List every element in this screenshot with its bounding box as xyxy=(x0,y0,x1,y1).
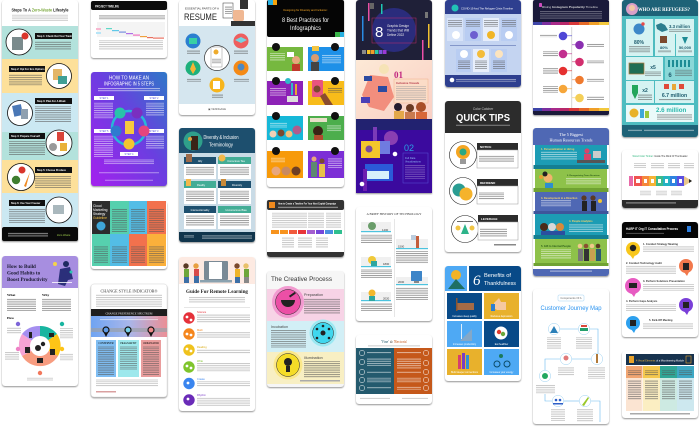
title: Guide For Remote Learning xyxy=(186,290,248,295)
tip: leverage: LEVERAGE xyxy=(481,217,498,221)
step labels: STEP 2 xyxy=(150,96,159,100)
panel: pencil process xyxy=(622,150,698,208)
section 02: Visualizations xyxy=(405,160,422,164)
benefit 6: Increases your energy xyxy=(490,371,514,374)
panel: quick tips xyxy=(445,101,521,252)
step 2: Step 2: Opt For Eco Options xyxy=(11,68,45,71)
why and what: How xyxy=(7,316,14,320)
section 02: 02 xyxy=(404,143,414,153)
panel: resume xyxy=(179,0,255,115)
practice 3 xyxy=(267,77,303,105)
panel: creative process xyxy=(267,271,344,387)
title: Marketing xyxy=(93,208,108,212)
title: Guideline xyxy=(93,216,107,220)
trend 4 xyxy=(534,214,608,239)
section 01: 01 xyxy=(394,70,404,80)
title: How to Create a Timeline For Your Next Capital Campaign xyxy=(278,203,336,206)
node 3 xyxy=(558,353,574,376)
node 1 xyxy=(547,323,561,349)
era 4: 2000 xyxy=(398,280,405,284)
pragmatist: PRAGMATIST xyxy=(120,342,137,345)
panel: good habits xyxy=(2,256,78,386)
term: identity: Diversity xyxy=(232,183,243,187)
step cycle diagram xyxy=(110,108,150,150)
step 2 xyxy=(9,64,72,88)
step 4: Step 4: Prepare Yourself xyxy=(11,135,40,138)
panel: graphic design trends: Trends that Will xyxy=(387,28,409,32)
title: The Creative Process xyxy=(271,276,332,283)
panel: covid timeline xyxy=(445,0,521,87)
panel: instagram timeline xyxy=(533,0,609,115)
lesson: 4: Write xyxy=(197,359,204,363)
colour strip bottom xyxy=(533,108,609,111)
practice 7 xyxy=(267,147,303,178)
tip: notice: NOTICE xyxy=(480,145,491,149)
practice 2 xyxy=(308,43,344,71)
panel: 8 best practices xyxy=(267,0,344,187)
footer xyxy=(8,232,71,237)
lesson: 6: Rhythm xyxy=(197,393,206,397)
era 2: 1500 xyxy=(398,244,405,248)
icon: badge right xyxy=(686,356,691,363)
step 4: 4. Perform Gaps Analysis xyxy=(626,299,658,303)
tip: refriend: REFRIEND xyxy=(480,181,496,185)
icon: badge xyxy=(687,226,691,232)
spectrum heading: CHANGE PREFERENCE SPECTRUM xyxy=(106,311,153,315)
lesson: 5: Create xyxy=(197,377,205,381)
title: Wood Color Timber: Inside The Mind Of The Reader xyxy=(632,154,688,158)
panel: graphic design trends: Graphic Design xyxy=(387,24,409,28)
title: ESSENTIAL PARTS OF A xyxy=(185,6,219,10)
icon: cloud xyxy=(96,222,106,230)
colour strip top xyxy=(533,22,609,25)
stat: 6: 6 xyxy=(668,73,672,79)
era 5: 2020 xyxy=(383,296,390,300)
practice 8 xyxy=(308,147,344,178)
stat: 80% and 50,000: 80% xyxy=(660,45,668,50)
step 2: 2. Conduct Technology Audit xyxy=(626,261,662,265)
step labels: STEP 5 xyxy=(100,129,109,133)
pencil chart xyxy=(629,176,692,186)
term: unconscious bias: Unconscious Bias xyxy=(225,208,247,212)
tip: notice xyxy=(450,142,518,168)
lesson: 1: Science xyxy=(197,310,207,314)
timeline gantt xyxy=(96,15,165,50)
icon: people xyxy=(184,132,202,150)
stat: x5: x5 xyxy=(650,65,656,71)
term: reality: Reality xyxy=(197,183,206,187)
step 1 xyxy=(6,29,73,55)
title: How to Build xyxy=(7,264,36,270)
habit wheel xyxy=(5,322,73,381)
column: orange xyxy=(626,366,642,411)
title: Customer Journey Map xyxy=(540,305,602,312)
lesson: 3: Reading xyxy=(197,345,207,349)
benefit 3: Increases productivity xyxy=(453,343,477,346)
step labels xyxy=(94,96,164,165)
term: conscious: Conscious Tea xyxy=(227,159,245,163)
column: teal xyxy=(660,366,677,411)
practice 6 xyxy=(308,112,344,140)
title xyxy=(7,264,48,283)
spectrum band xyxy=(91,316,167,337)
step 3: Step 3: Plan For A Week xyxy=(37,100,66,103)
lesson: 4 xyxy=(183,359,250,373)
conserver: CONSERVER xyxy=(98,342,114,345)
resume hub xyxy=(204,46,230,70)
panel: quick tips: QUICK TIPS xyxy=(456,113,510,124)
panel: human resources trends: Human Resources Trends xyxy=(549,138,593,142)
icon: globe xyxy=(452,4,458,12)
resume item: awards xyxy=(210,78,224,98)
icon: sunrise mountains xyxy=(445,266,467,291)
title: Good Habits to xyxy=(7,270,41,276)
lesson: 6 xyxy=(183,393,250,406)
step 6 xyxy=(9,197,72,223)
illumination: Illumination xyxy=(304,356,323,360)
stat: x2: x2 xyxy=(642,88,648,94)
panel: remote learning xyxy=(179,257,255,411)
milestones xyxy=(540,32,604,102)
section 02 xyxy=(356,127,432,193)
title: PROJECT TIMELINE xyxy=(95,4,119,8)
node 6 xyxy=(551,395,565,421)
resume item: skills xyxy=(186,60,201,82)
why and what: What xyxy=(7,293,16,297)
title: Steps To A Zero-Waste Lifestyle xyxy=(12,8,69,12)
trend 3 xyxy=(534,192,608,214)
title: Color Catcher xyxy=(473,107,494,111)
step 1: Step 1: Check Out Your Trash xyxy=(37,35,73,38)
trend 1 xyxy=(534,145,608,169)
step 3: 3. Perform Solutions Presentation xyxy=(643,279,685,283)
title: A BRIEF HISTORY OF TECHNOLOGY xyxy=(366,212,422,216)
step 5 xyxy=(8,164,72,190)
resume item: experience xyxy=(234,60,249,82)
benefit 4: Eat healthier xyxy=(495,343,508,346)
node 2 xyxy=(576,323,592,349)
originator: ORIGINATOR xyxy=(143,342,159,345)
panel: cloud marketing strategy xyxy=(91,201,167,269)
icon: badge xyxy=(269,202,275,208)
footer xyxy=(622,125,698,137)
lesson: 1 xyxy=(183,310,250,324)
trend 5: 5. Gift to Internal People xyxy=(541,244,571,248)
stat: 80%: 80% xyxy=(634,40,645,46)
icon: hands with resume xyxy=(223,0,255,26)
right column xyxy=(394,348,432,394)
title: Diversity & Inclusion xyxy=(204,135,239,141)
title: 6 xyxy=(473,273,481,289)
preparation: Preparation xyxy=(304,293,323,297)
step labels: STEP 3 xyxy=(150,129,159,133)
resume item: education xyxy=(234,34,248,54)
title: The 5 Biggest xyxy=(559,132,584,137)
node 4 xyxy=(588,353,605,379)
why and what xyxy=(7,293,71,320)
icon: book xyxy=(629,356,634,363)
term: ally: Ally xyxy=(198,159,203,163)
section 01: Inclusive Visuals xyxy=(396,81,420,85)
panel: how to make an infographic: INFOGRAPHIC IN 5 STEPS xyxy=(104,82,155,88)
practice 4 xyxy=(308,77,344,105)
trend 2 xyxy=(534,169,608,192)
resume item: contact xyxy=(186,34,200,54)
icon: runner xyxy=(52,261,73,286)
panel: 8 best practices: Infographics xyxy=(290,26,321,32)
icon: person xyxy=(626,3,638,15)
subtitle: Components Of A xyxy=(560,296,582,300)
logo: ▣ VENNGAGE xyxy=(208,107,226,111)
practice 5 xyxy=(267,112,303,140)
panel: resume: RESUME xyxy=(184,12,217,22)
hero circle xyxy=(362,3,430,60)
months strip xyxy=(271,230,342,234)
panel: brief history of technology xyxy=(356,207,432,321)
step labels: STEP 1 xyxy=(100,96,109,100)
section 01 xyxy=(356,60,432,119)
panel: customer journey map xyxy=(533,289,609,424)
panel: graphic design trends xyxy=(356,0,432,193)
step 6: Step 6: Use Your Freezer xyxy=(11,202,40,205)
benefit 5: Build deeper connections xyxy=(451,371,479,374)
lesson: 2 xyxy=(183,328,250,340)
step 3 xyxy=(8,98,72,126)
footer: Zero Waste xyxy=(57,233,71,237)
era 3: 1800 xyxy=(383,262,390,266)
why and what: Why xyxy=(42,293,49,297)
panel: benefits of thankfulness xyxy=(445,266,521,381)
node 7 xyxy=(577,395,593,422)
title: Boost Productivity xyxy=(7,277,48,283)
panel: benefits of thankfulness: Benefits of xyxy=(484,273,512,279)
section 02: Full Data xyxy=(405,156,416,160)
panel: human resources trends xyxy=(533,128,609,276)
panel: who are refugees xyxy=(622,0,698,137)
title: Strategy xyxy=(93,212,106,216)
panel: harp it consultation process xyxy=(622,222,698,337)
footer xyxy=(622,200,698,208)
icon: instagram xyxy=(539,3,542,7)
timeline bottom row xyxy=(456,49,507,72)
step 1: 1. Conduct Strategy Meeting xyxy=(643,242,678,246)
title: HOW TO MAKE AN xyxy=(109,76,149,82)
trend 4: 4. People Analytics xyxy=(569,219,593,223)
title: HARP IT Org IT Consultation Process xyxy=(626,227,678,231)
phase columns xyxy=(272,212,341,228)
footer xyxy=(533,269,609,276)
left column xyxy=(356,348,394,394)
panel: change style indicator xyxy=(91,284,167,397)
lesson: 3 xyxy=(183,344,250,356)
panel: capital campaign timeline xyxy=(267,200,344,257)
title: Cloud xyxy=(93,204,102,208)
panel: graphic design trends: Define 2022 xyxy=(387,33,404,37)
stat: 3.3 million: 3.3 million xyxy=(669,24,690,29)
title: WHO ARE REFUGEES? xyxy=(638,8,690,13)
panel: diversity terminology xyxy=(179,128,255,242)
era 1: 1400 xyxy=(382,228,389,232)
step 5: Step 5: Choose Produce xyxy=(37,169,67,172)
journey connectors xyxy=(545,329,600,422)
trend 3: 3. Development in a Direction xyxy=(541,196,578,200)
panel: benefits of thankfulness: Thankfulness xyxy=(484,281,516,287)
panel: diversity terminology: Terminology xyxy=(209,142,233,148)
lesson: 5 xyxy=(183,377,250,389)
panel: project timeline xyxy=(91,1,167,58)
trend 1: 1. Personalization in Hiring xyxy=(541,147,575,151)
column: blue xyxy=(677,366,694,411)
title: 4 Visual Elements of a Microlearning Module xyxy=(636,358,684,362)
tip: leverage xyxy=(452,215,518,242)
trend 2: 2. Reorganizing Team Structure xyxy=(567,174,601,177)
title xyxy=(93,204,108,220)
panel: microlearning module xyxy=(622,351,698,418)
term: intersectionality: Intersectionality xyxy=(191,208,210,212)
footer xyxy=(445,75,521,87)
column: yellow xyxy=(643,366,660,411)
footer xyxy=(179,232,255,242)
bottom notes xyxy=(640,190,682,196)
stat: 80% and 50,000 xyxy=(655,34,694,56)
benefit 2: Reduces depression xyxy=(491,315,513,318)
title: COVID-19 And The Refugee Crisis Timeline xyxy=(461,6,513,10)
panel: zero-waste lifestyle xyxy=(2,0,78,241)
step labels: STEP 4 xyxy=(125,152,134,156)
incubation: Incubation xyxy=(271,325,288,329)
stat: 2.6 million: 2.6 million xyxy=(656,107,686,114)
top notes xyxy=(634,163,694,169)
illustration: laptop and students xyxy=(183,261,249,283)
node 5 xyxy=(536,370,555,394)
palette chips xyxy=(362,50,386,54)
timeline top row xyxy=(447,18,517,41)
practice 1 xyxy=(267,43,303,71)
subtitle: Designing for Diversity and Inclusion: xyxy=(283,8,328,12)
stat: 6.7 million: 6.7 million xyxy=(662,93,687,99)
tip: refriend xyxy=(450,178,518,204)
trend 5 xyxy=(534,239,608,266)
title: CHANGE STYLE INDICATOR® xyxy=(100,288,158,294)
benefit 1: Increases sleep quality xyxy=(452,315,477,318)
panel: vine vs rectoria comparison xyxy=(356,335,432,404)
lesson: 2: Math xyxy=(197,328,203,332)
stat: 80% and 50,000: 50,000 xyxy=(679,45,692,50)
step 5: 5. Kick-Off Meeting xyxy=(649,318,673,322)
title: 8 xyxy=(375,24,383,41)
title: 8 Best Practices for xyxy=(282,18,329,24)
step 4 xyxy=(9,130,72,156)
title: 'Vine' ⊙ 'Rectoria' xyxy=(381,340,408,344)
panel: how to make an infographic xyxy=(91,72,167,186)
title: Rising Instagram Popularity Timeline xyxy=(542,5,598,9)
